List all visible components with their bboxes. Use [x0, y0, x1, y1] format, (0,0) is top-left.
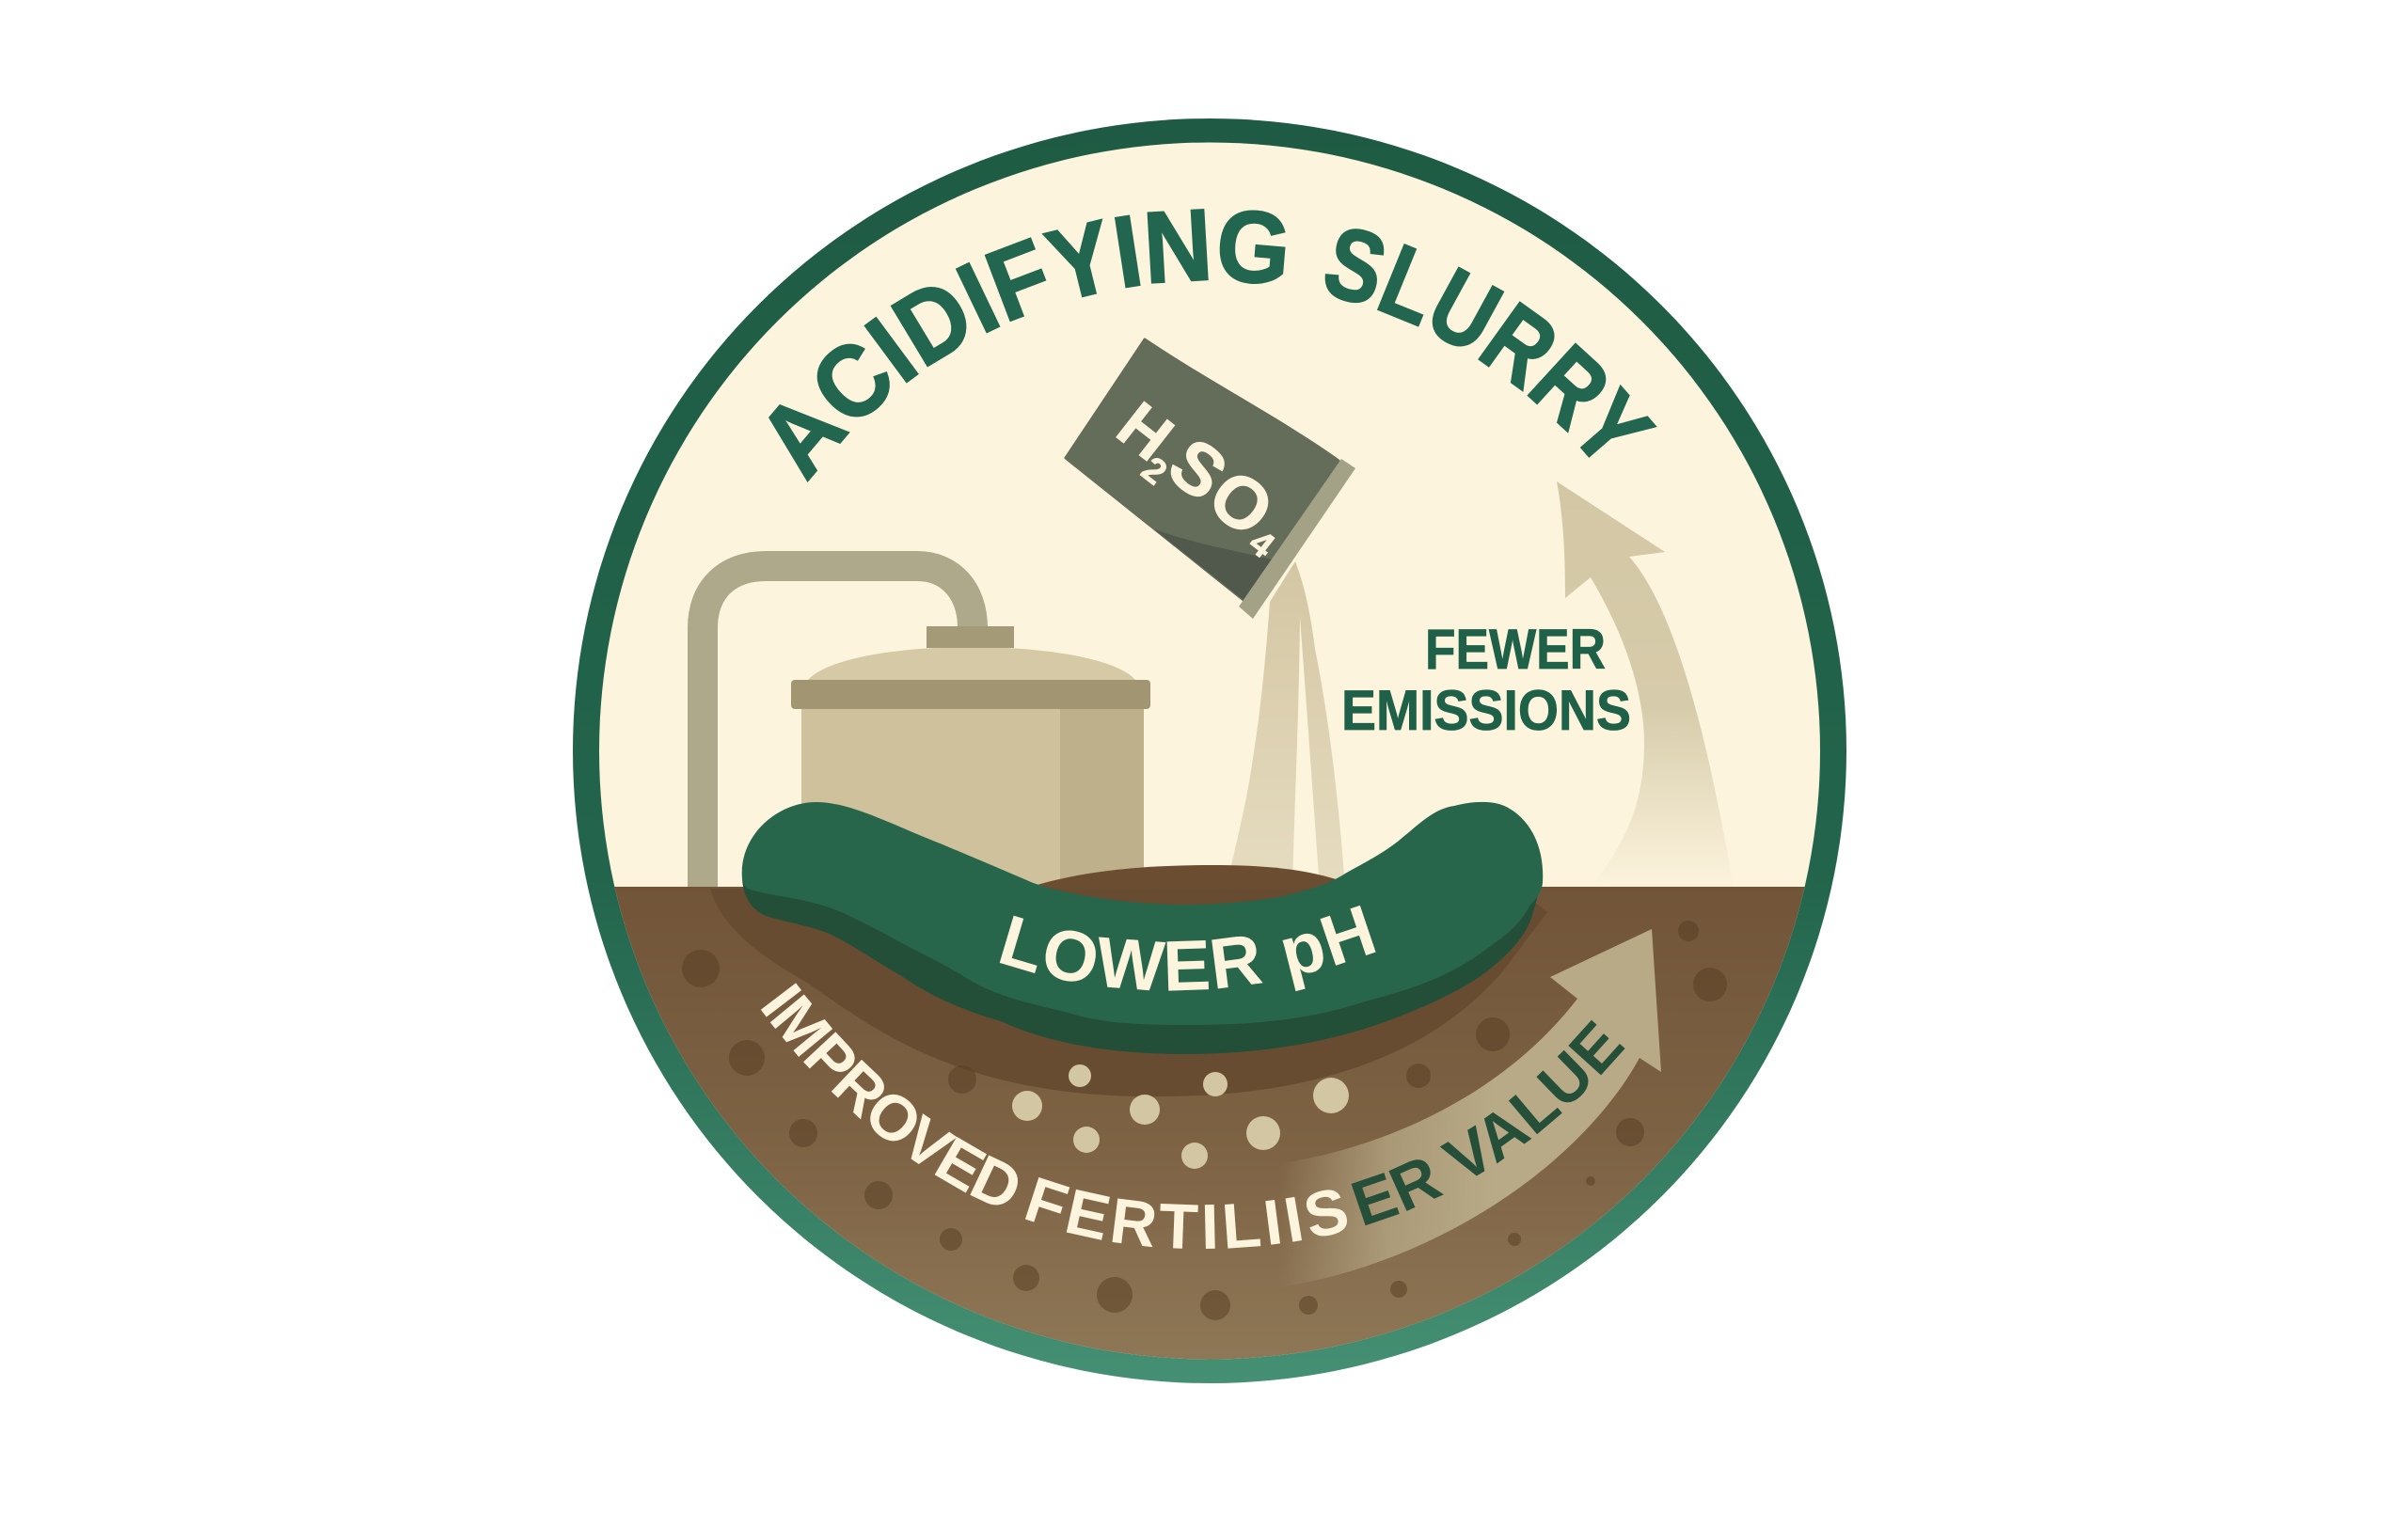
label: fewer emissions: EMISSIONS: [1341, 679, 1631, 742]
label: H2SO4: 4: [1242, 523, 1281, 566]
label: lower pH: LOWER pH: [999, 905, 1375, 991]
soil mound: [1038, 865, 1336, 887]
title: ACIDIFYING SLURRY: [768, 209, 1657, 482]
acid bucket: [1066, 339, 1355, 619]
soil pebbles: [682, 921, 1727, 1320]
badge ring: [573, 118, 1846, 1383]
bucket shade: [1154, 529, 1273, 600]
label: fewer emissions: FEWER: [1425, 618, 1606, 681]
pipe: [703, 566, 973, 891]
label: improved fertiliser value: IMPROVED FERTILIISER VALUE: [760, 983, 1625, 1249]
lower pH band: [741, 801, 1543, 1054]
tank body: [801, 709, 1060, 885]
label: H2SO4: H: [1104, 387, 1187, 475]
soil: [615, 887, 1804, 1360]
band extruded edge: [742, 878, 1543, 1054]
label: H2SO4: O: [1194, 452, 1290, 553]
bucket rim: [1239, 459, 1355, 619]
band top face: [742, 802, 1543, 1025]
label: fewer emissions: [1341, 618, 1631, 742]
fertiliser value arrow: [1296, 929, 1661, 1283]
acid stream: [1226, 561, 1345, 889]
emissions arrow: [1557, 481, 1734, 889]
tank rim: [791, 680, 1150, 709]
tank cap: [927, 626, 1014, 648]
label: H2SO4: S: [1153, 421, 1243, 516]
sky panel: [599, 143, 1820, 1360]
label: H2SO4: 2: [1133, 449, 1174, 493]
band shadow: [710, 889, 1547, 1096]
nutrient dots: [1012, 1064, 1349, 1169]
storage tank: [791, 626, 1150, 897]
tank dome: [808, 647, 1135, 680]
scene clipped to badge: [615, 481, 1804, 1360]
bucket body: [1066, 339, 1339, 600]
